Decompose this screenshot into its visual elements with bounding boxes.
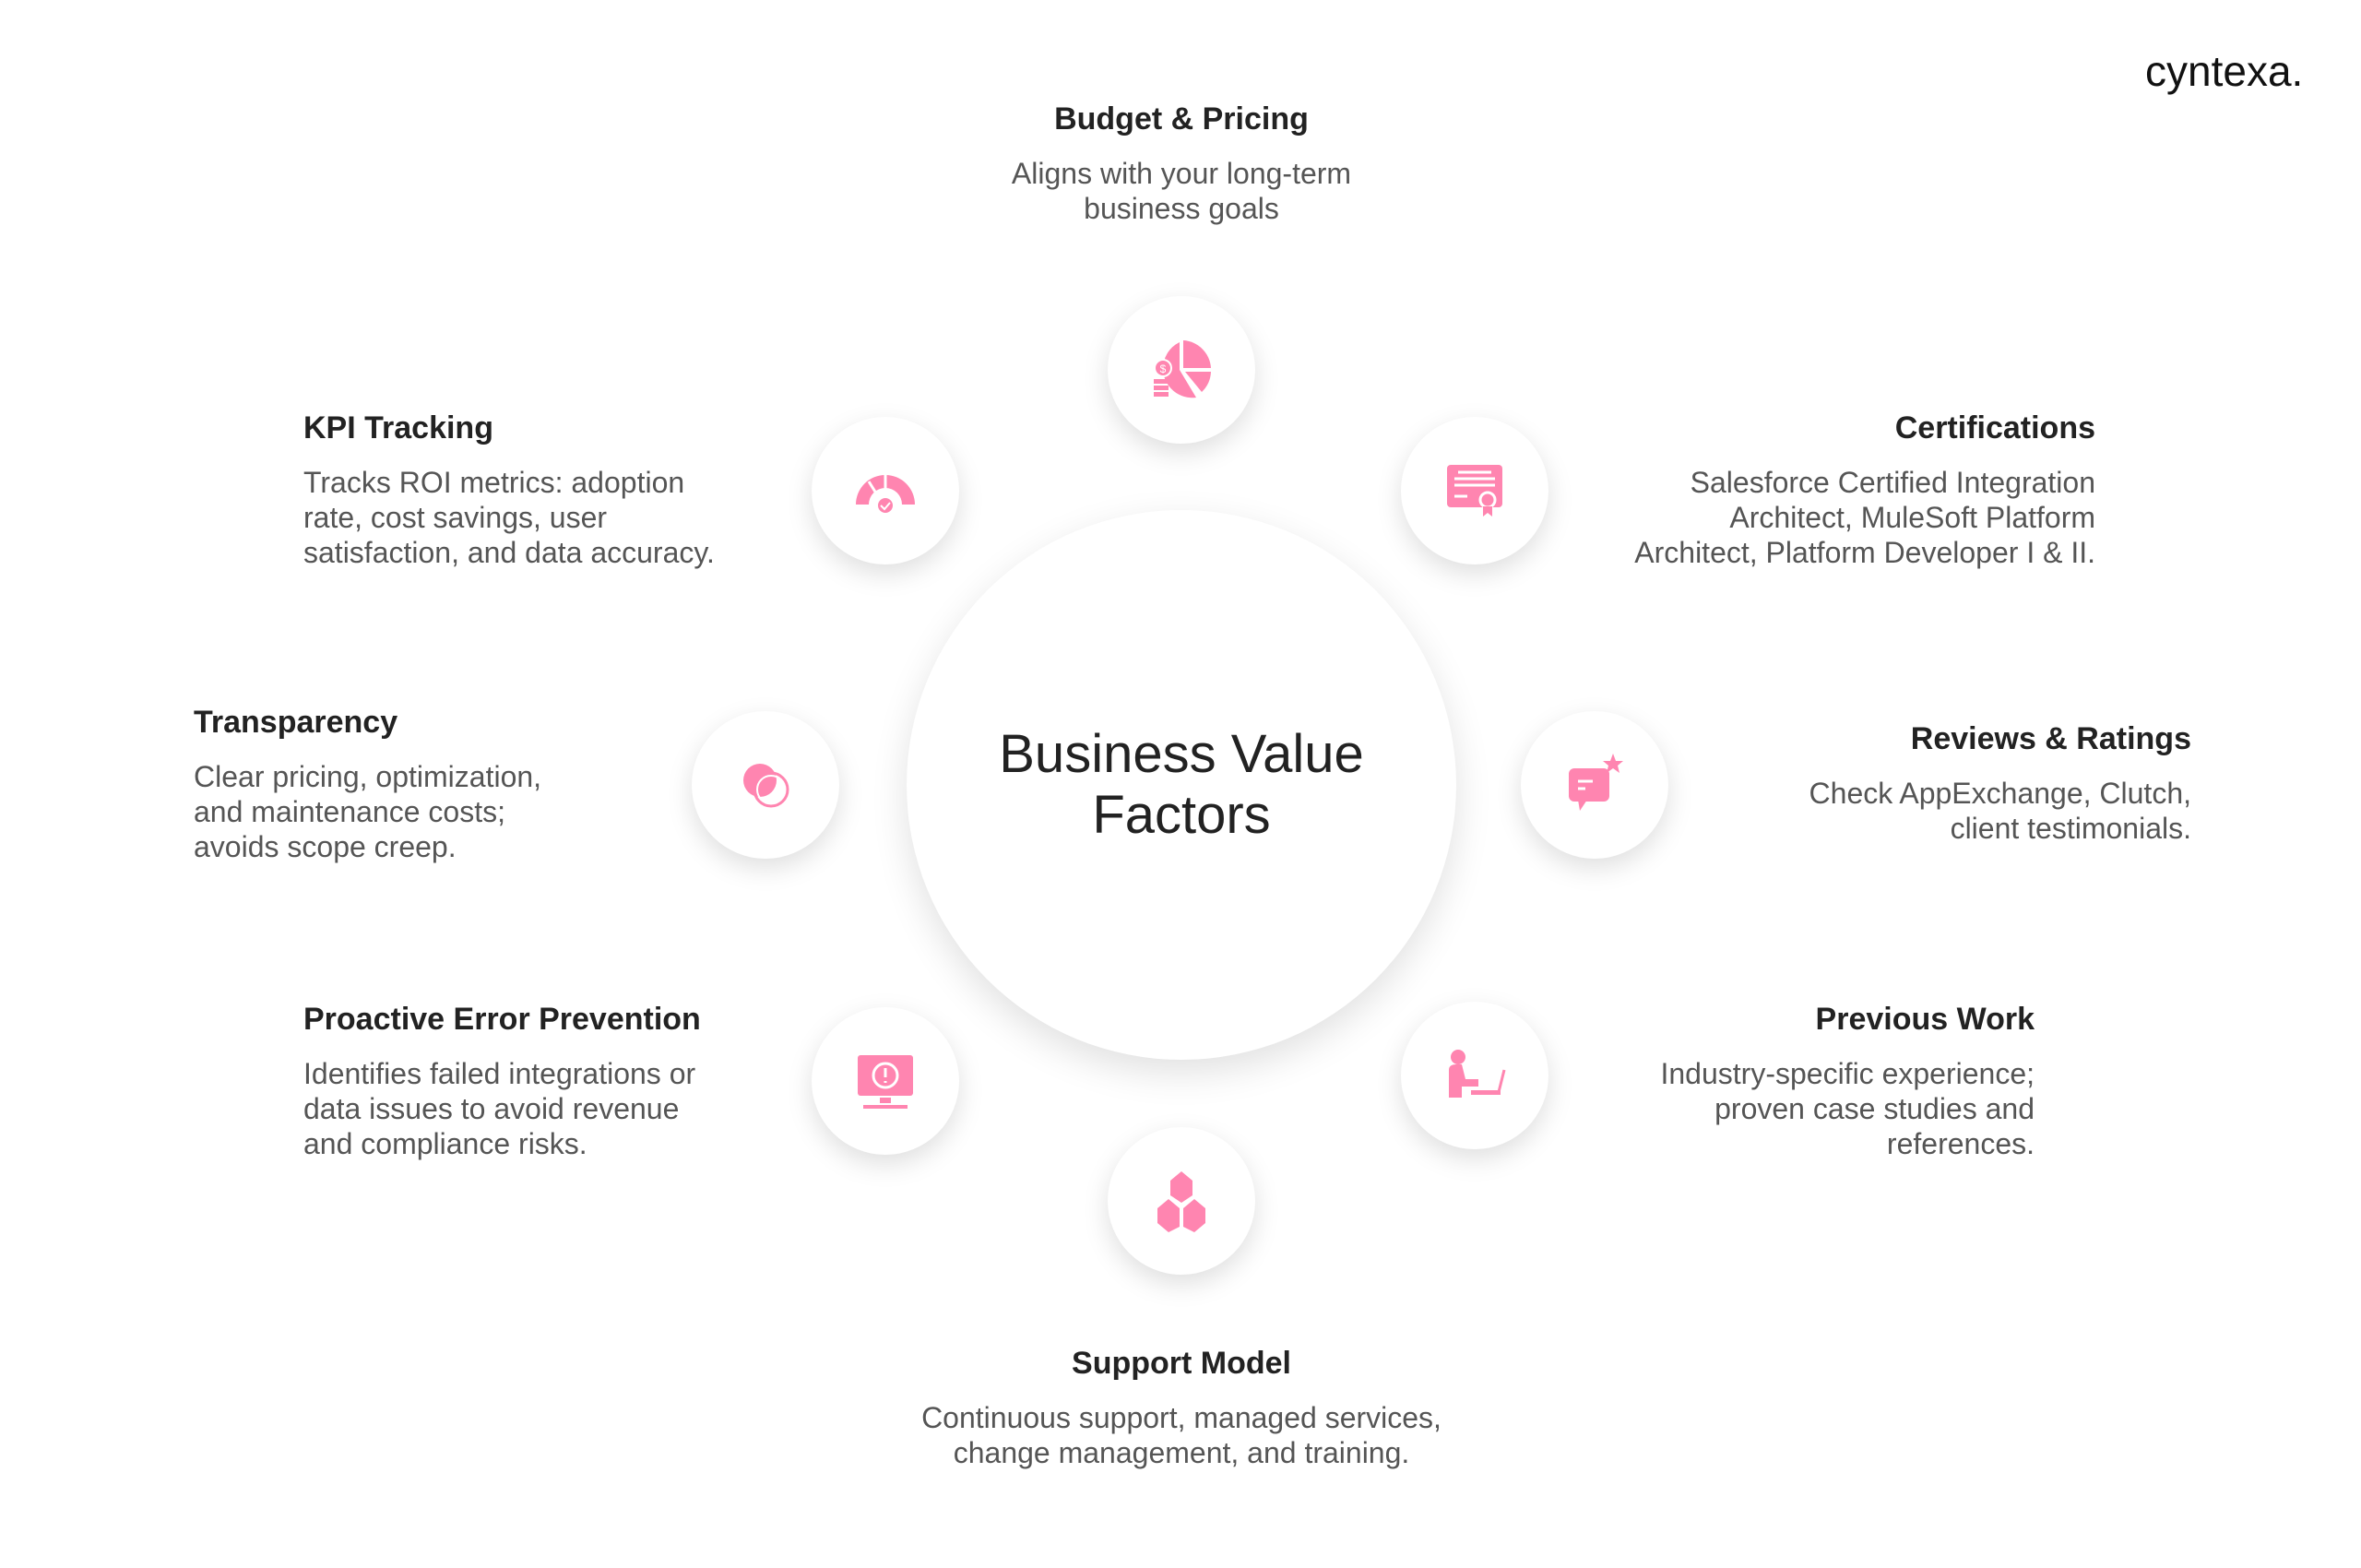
logo: cyntexa.: [2145, 47, 2303, 95]
text: budget: business goals: [1084, 192, 1279, 225]
icon: budget: $: [1160, 362, 1167, 375]
text: transparency: and maintenance costs;: [194, 795, 505, 828]
center circle: [907, 510, 1456, 1060]
text: certifications: Architect, MuleSoft Platform: [1729, 501, 2095, 534]
icon: budget: [1108, 296, 1255, 444]
text: previous work: [1660, 1002, 2035, 1160]
text: support: change management, and training.: [954, 1436, 1409, 1469]
text: certifications: Salesforce Certified Integration: [1691, 466, 2095, 499]
text: transparency: avoids scope creep.: [194, 830, 457, 863]
text: support: [921, 1346, 1442, 1469]
icon: certifications: [1401, 417, 1548, 564]
center circle: Business Value: [999, 724, 1364, 784]
text: transparency: Clear pricing, optimization,: [194, 760, 541, 793]
text: transparency: Transparency: [194, 705, 397, 740]
text: certifications: Certifications: [1895, 410, 2095, 445]
text: budget: Budget & Pricing: [1054, 101, 1309, 137]
text: proactive: Proactive Error Prevention: [303, 1002, 701, 1037]
text: previous work: Previous Work: [1816, 1002, 2035, 1037]
icon: reviews: [1521, 711, 1668, 859]
text: support: Support Model: [1072, 1346, 1291, 1381]
text: reviews: Reviews & Ratings: [1911, 721, 2191, 756]
text: proactive: and compliance risks.: [303, 1127, 587, 1160]
icon: kpi: [812, 417, 959, 564]
text: previous work: references.: [1887, 1127, 2035, 1160]
text: certifications: Architect, Platform Developer I & II.: [1634, 536, 2095, 569]
text: reviews: client testimonials.: [1951, 812, 2191, 845]
text: kpi: Tracks ROI metrics: adoption: [303, 466, 684, 499]
icon: proactive: [812, 1007, 959, 1155]
text: reviews: Check AppExchange, Clutch,: [1809, 777, 2191, 810]
text: previous work: proven case studies and: [1714, 1092, 2035, 1125]
center circle: Factors: [1092, 785, 1271, 845]
text: kpi: satisfaction, and data accuracy.: [303, 536, 715, 569]
text: reviews: [1809, 721, 2191, 845]
text: previous work: Industry-specific experience;: [1660, 1057, 2035, 1090]
text: budget: [1012, 101, 1351, 225]
text: kpi: [303, 410, 715, 569]
text: kpi: rate, cost savings, user: [303, 501, 607, 534]
text: proactive: [303, 1002, 701, 1160]
text: transparency: [194, 705, 541, 863]
text: proactive: data issues to avoid revenue: [303, 1092, 679, 1125]
text: certifications: [1634, 410, 2095, 569]
icon: support: [1108, 1127, 1255, 1275]
text: proactive: Identifies failed integrations or: [303, 1057, 695, 1090]
text: support: Continuous support, managed services,: [921, 1401, 1442, 1434]
text: budget: Aligns with your long-term: [1012, 157, 1351, 190]
icon: transparency: [692, 711, 839, 859]
text: kpi: KPI Tracking: [303, 410, 493, 445]
icon: previous work: [1401, 1002, 1548, 1149]
